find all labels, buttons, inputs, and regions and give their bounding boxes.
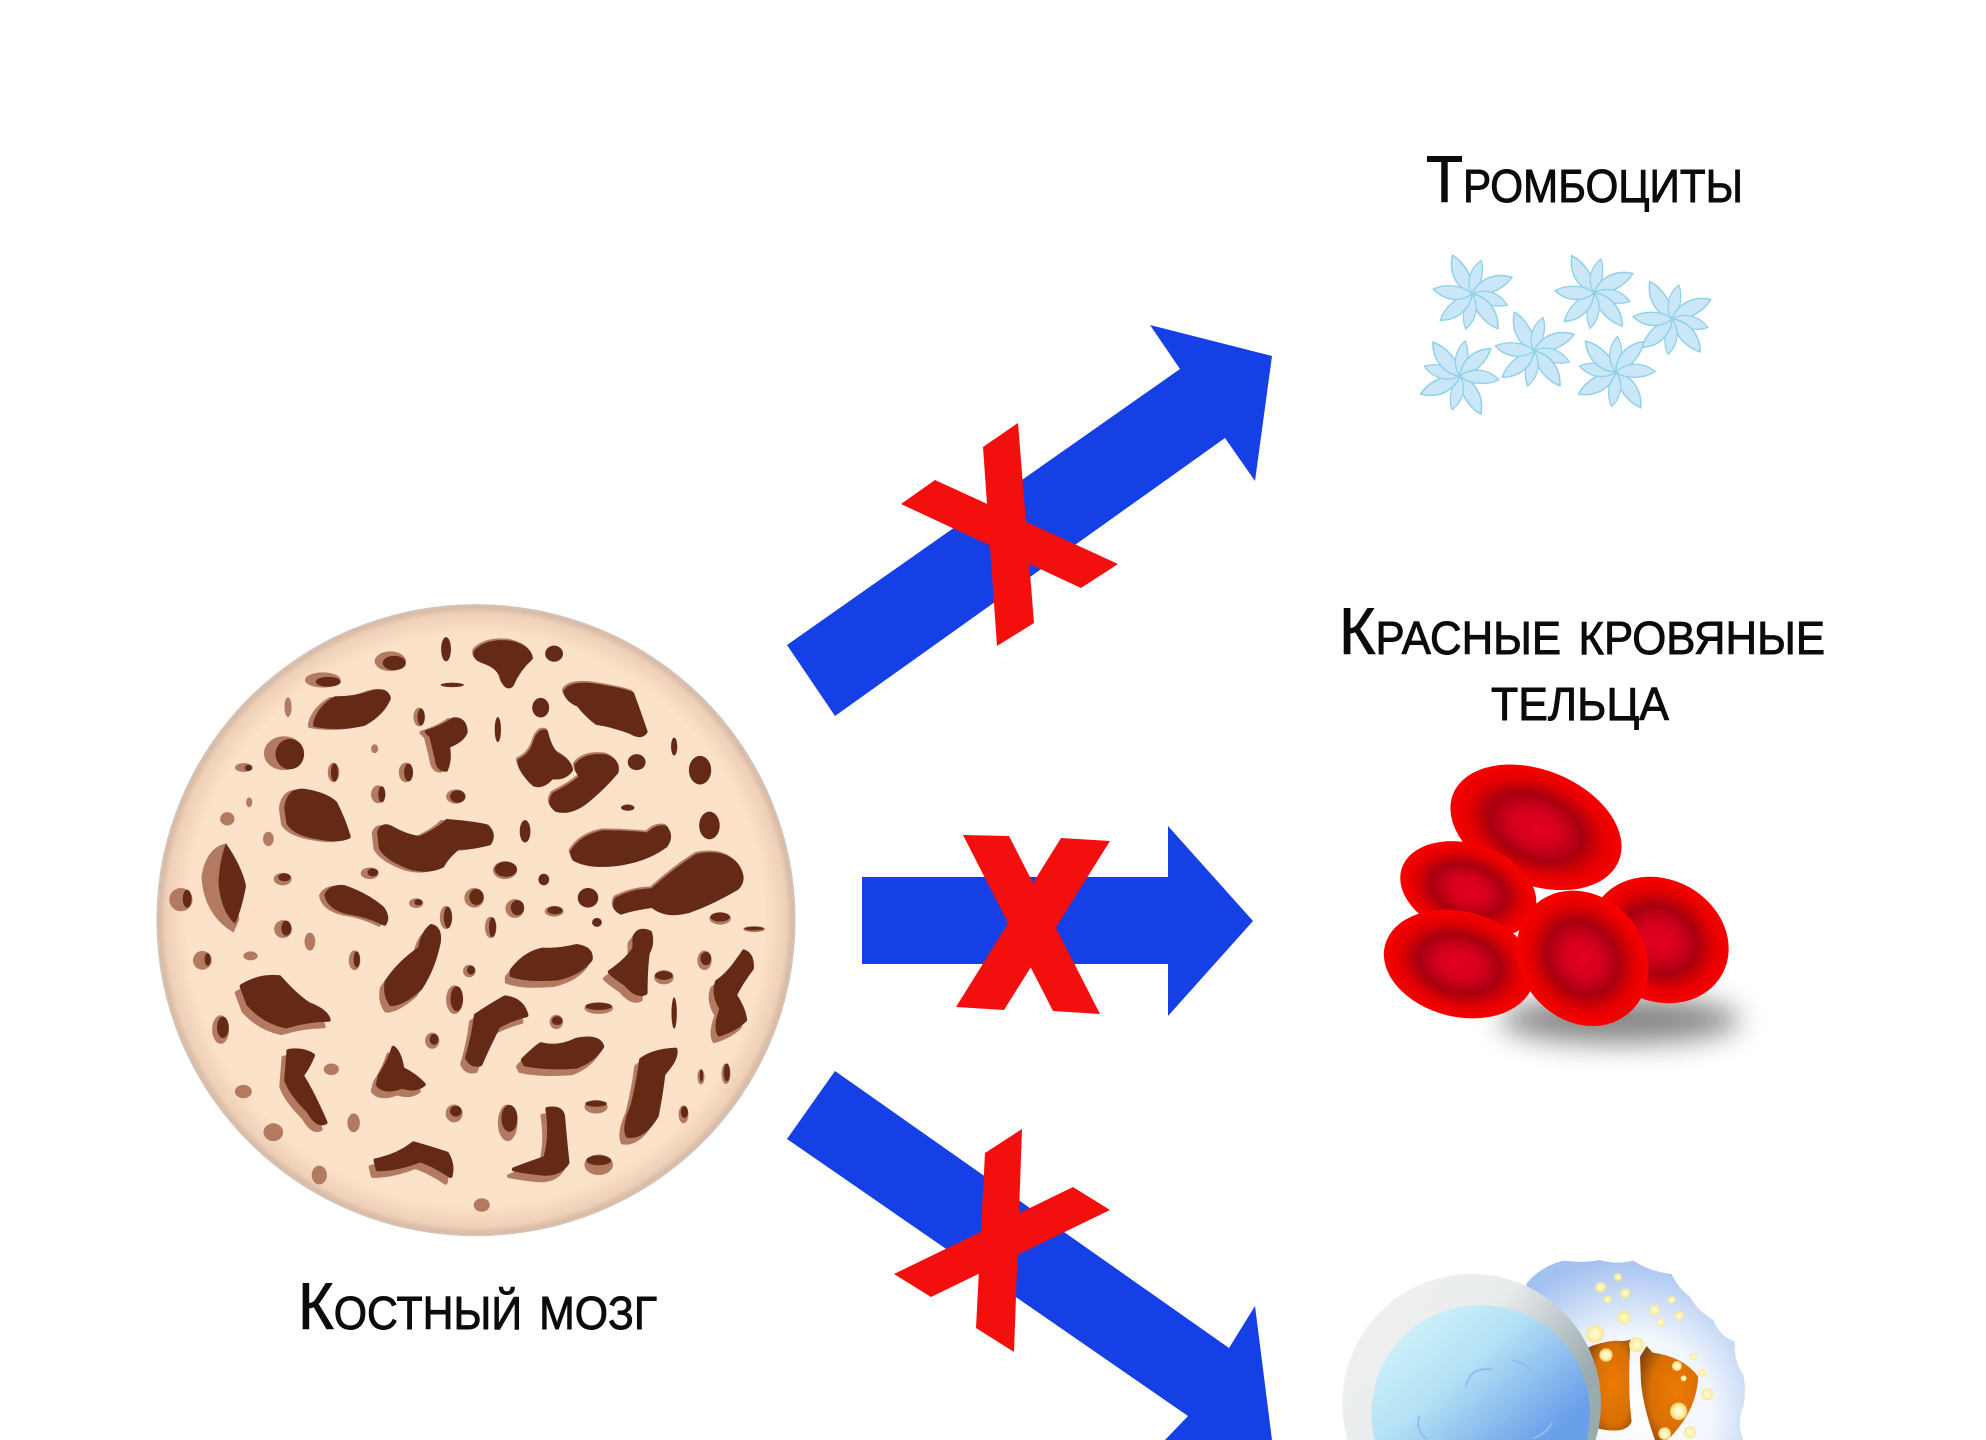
bone marrow cross-section — [156, 604, 796, 1236]
label: bone marrow: Костный мозг — [298, 1269, 657, 1343]
marrow cavities: dark interiors — [183, 637, 764, 1176]
granules — [1586, 1273, 1713, 1440]
arrow: to red blood cells — [862, 826, 1253, 1016]
granulocyte cytoplasm — [1500, 1260, 1745, 1440]
red blood cells cluster — [1372, 741, 1751, 1053]
marrow disc — [156, 604, 796, 1236]
red cross: bottom arrow — [894, 1129, 1110, 1352]
platelets cluster — [1417, 249, 1717, 419]
cell: left — [1388, 825, 1549, 955]
cell: top — [1432, 741, 1640, 914]
arrow: to platelets — [787, 325, 1272, 716]
white blood cells — [1342, 1260, 1745, 1440]
arrow: to white blood cells — [787, 1071, 1272, 1440]
cast shadow — [1500, 997, 1740, 1043]
cell: lower left — [1372, 894, 1546, 1034]
lymphocyte nucleus — [1371, 1305, 1590, 1440]
lymphocyte membrane — [1342, 1274, 1601, 1440]
label: red blood cells: ТЕЛЬЦА — [1491, 678, 1669, 730]
nucleus marks — [1418, 1361, 1552, 1439]
cell: back right — [1568, 853, 1751, 1027]
red cross: top arrow — [901, 423, 1118, 646]
cell: front — [1489, 864, 1676, 1053]
label: red blood cells: Красные кровяные — [1339, 594, 1825, 668]
label: platelets: Тромбоциты — [1426, 142, 1743, 216]
marrow cavities: soft shadows — [169, 640, 765, 1212]
granulocyte nucleus lobes — [1587, 1339, 1698, 1440]
label: red blood cells — [1339, 594, 1825, 730]
red cross: middle arrow — [956, 835, 1110, 1014]
